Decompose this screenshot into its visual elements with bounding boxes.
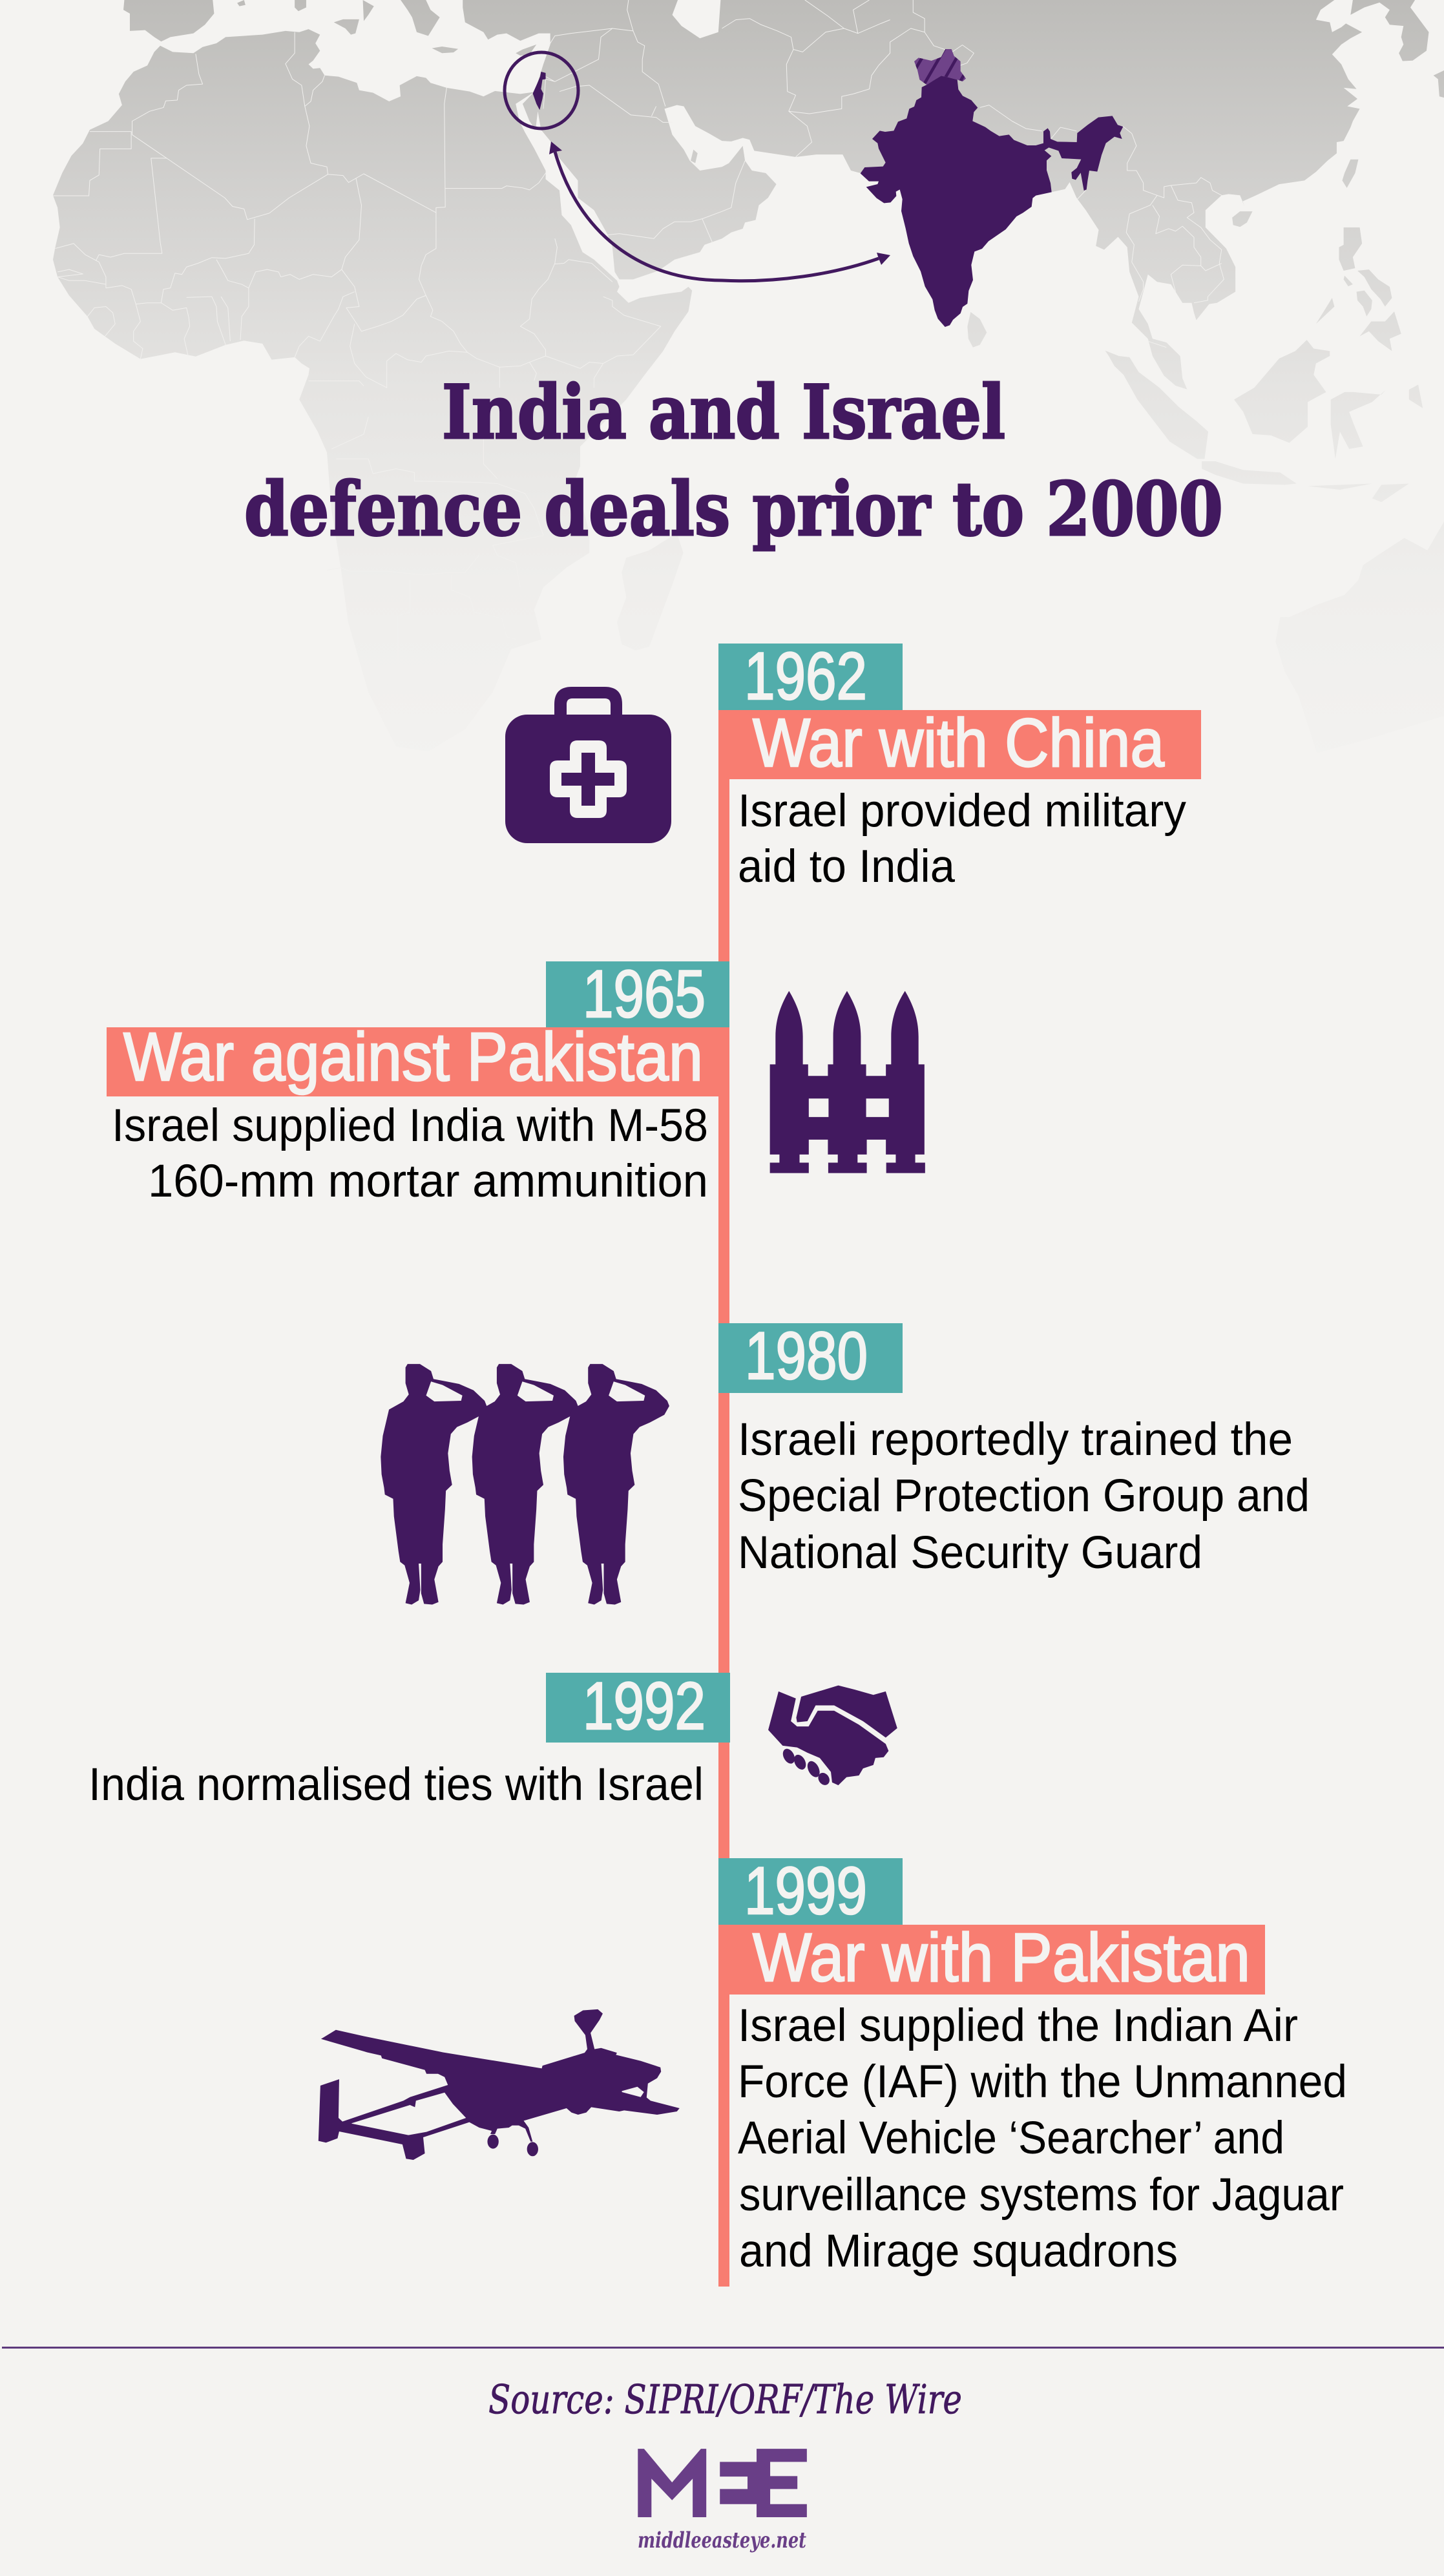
entry: 1999	[718, 1854, 1347, 2277]
logo mark MEE	[638, 2449, 807, 2517]
entry: 1980	[718, 1319, 1310, 1578]
body text 1980	[738, 1414, 1310, 1578]
icon: three saluting soldiers	[381, 1364, 669, 1604]
body text 1965	[112, 1100, 708, 1207]
icon: Searcher drone	[319, 2009, 680, 2160]
year tag 1962: 1962	[744, 639, 867, 714]
footer divider	[2, 2347, 1444, 2349]
body text 1999: Force (IAF) with the Unmanned	[738, 2057, 1347, 2108]
entry: 1992	[89, 1669, 730, 1810]
circle around Israel	[505, 52, 578, 129]
heading: War with Pakistan: War with Pakistan	[753, 1920, 1250, 1996]
logo: Middle East Eye	[638, 2449, 807, 2553]
body text 1962	[738, 786, 1186, 892]
body text 1962: aid to India	[738, 841, 955, 892]
arrow: between Israel and India	[549, 141, 890, 281]
heading: War against Pakistan: War against Pakistan	[123, 1019, 703, 1095]
body text 1999: Aerial Vehicle ‘Searcher’ and	[738, 2113, 1284, 2164]
body text 1980: National Security Guard	[738, 1527, 1202, 1578]
title	[244, 369, 1223, 552]
icon: disputed Kashmir hatched region	[914, 49, 966, 85]
body text 1999: and Mirage squadrons	[739, 2226, 1178, 2277]
body text 1999	[738, 2000, 1347, 2277]
body text 1999: Israel supplied the Indian Air	[738, 2000, 1298, 2051]
body text 1980: Special Protection Group and	[738, 1471, 1310, 1522]
body text 1965: Israel supplied India with M-58	[112, 1100, 708, 1151]
entry: 1965	[107, 957, 729, 1207]
icon: Israel silhouette	[533, 72, 546, 110]
body text 1999: surveillance systems for Jaguar	[739, 2170, 1344, 2221]
year tag 1999: 1999	[744, 1854, 867, 1929]
title: defence deals prior to 2000	[244, 466, 1223, 552]
map: India silhouette	[861, 47, 1123, 327]
year tag 1965: 1965	[583, 957, 706, 1032]
body text 1992: India normalised ties with Israel	[89, 1759, 704, 1810]
icon: handshake	[768, 1686, 897, 1786]
icon: ammunition rounds	[770, 991, 925, 1173]
year tag 1992: 1992	[583, 1669, 706, 1744]
timeline spine	[718, 644, 729, 2287]
title: India and Israel	[442, 369, 1005, 456]
icon: medical kit	[505, 687, 671, 843]
year tag 1980: 1980	[745, 1319, 868, 1394]
entry: 1962	[718, 639, 1201, 892]
source line: Source: SIPRI/ORF/The Wire	[488, 2376, 962, 2423]
world map background	[53, 0, 1444, 522]
map: Israel location marker	[505, 52, 578, 129]
body text 1980: Israeli reportedly trained the	[738, 1414, 1293, 1465]
body text 1962: Israel provided military	[738, 786, 1186, 837]
body text 1965: 160-mm mortar ammunition	[148, 1156, 708, 1207]
logo text: middleeasteye.net	[638, 2528, 806, 2553]
heading: War with China: War with China	[753, 705, 1164, 781]
